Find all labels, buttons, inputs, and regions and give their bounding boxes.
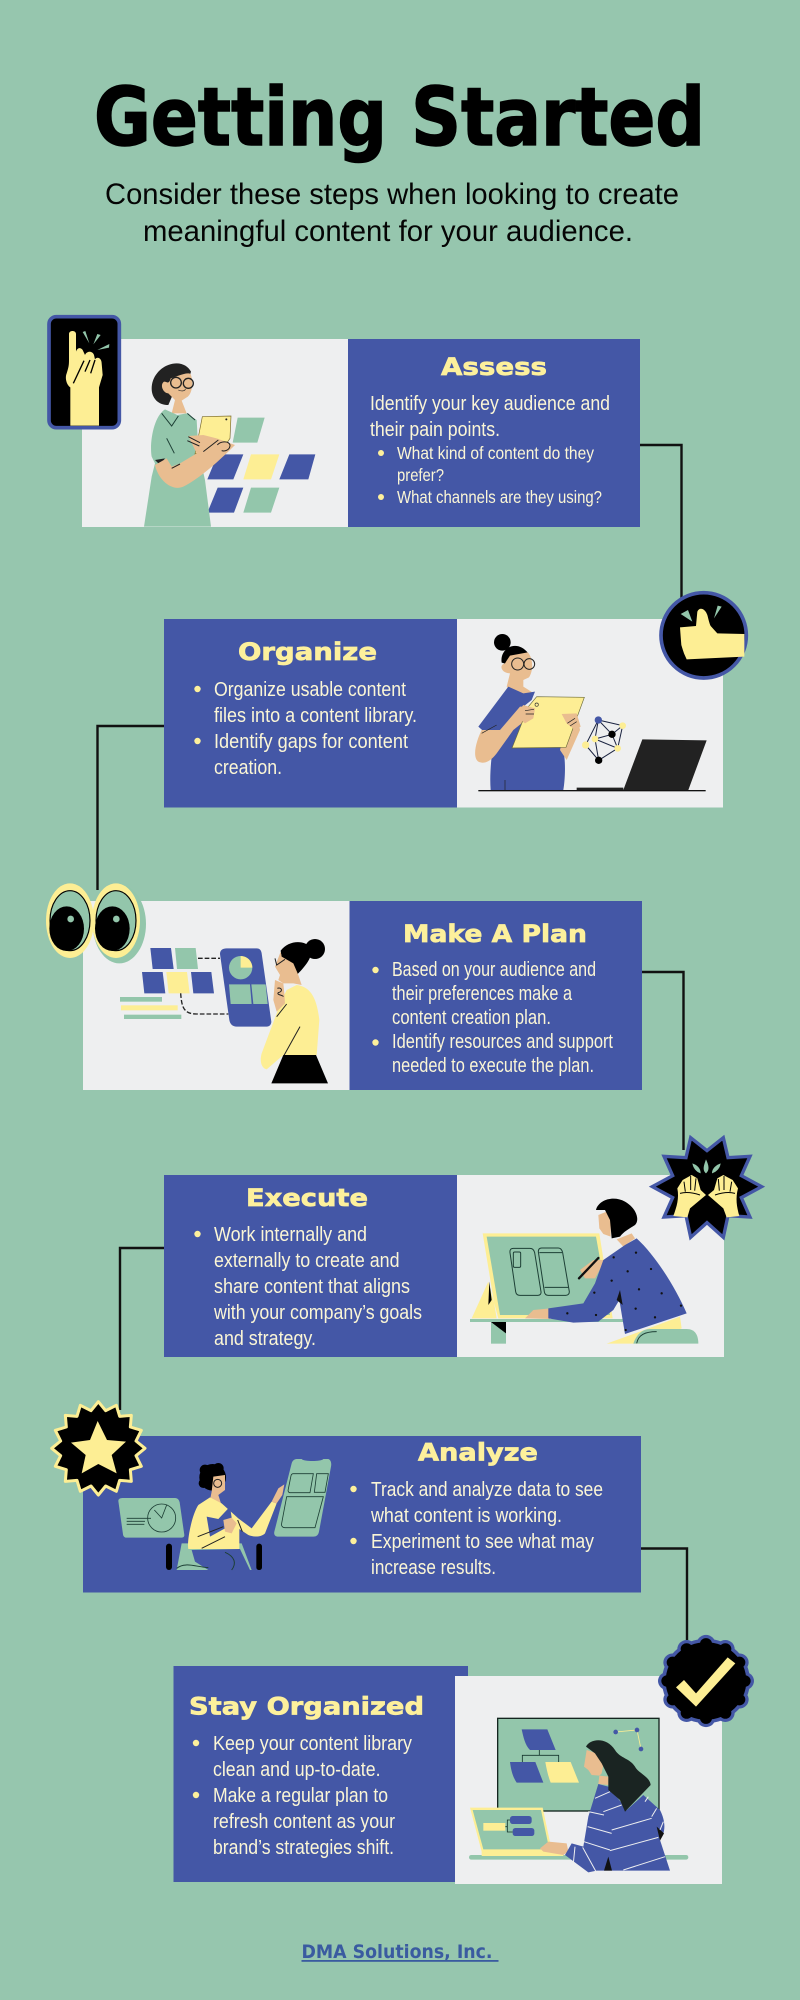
illustration: person analysing screens [118, 1459, 331, 1570]
heading: Assess: Assess [441, 353, 547, 381]
panel: Stay Organized [174, 1635, 754, 1884]
heading: Analyze: Analyze [418, 1438, 538, 1466]
arrow: connector Assess to Organize [640, 445, 682, 600]
panel: Make A Plan [46, 883, 642, 1090]
text: Stay Organized body: Make a regular plan to [213, 1785, 388, 1807]
illustration: woman at drawing tablet [470, 1199, 698, 1344]
panel: Organize [164, 593, 746, 808]
text: Make A Plan body: their preferences make a [392, 983, 573, 1005]
text: Execute body: share content that aligns [214, 1276, 410, 1298]
icon: pointing hand [49, 317, 119, 428]
heading: Make A Plan: Make A Plan [403, 920, 587, 948]
heading: Organize: Organize [238, 638, 377, 666]
illustration: woman at board with laptop [469, 1718, 688, 1872]
text: Analyze body [350, 1479, 603, 1579]
text: Organize body: creation. [214, 757, 282, 779]
illustration: woman planning with phone and cards [120, 939, 328, 1083]
text: Organize body [194, 679, 417, 779]
text: Make A Plan body: Identify resources and support [392, 1031, 613, 1053]
text: Assess body: Identify your key audience and [370, 393, 610, 415]
text: Assess body [370, 393, 610, 507]
text: Make A Plan body: content creation plan. [392, 1007, 551, 1029]
text: Analyze body: Experiment to see what may [371, 1531, 594, 1553]
title: Getting Started [94, 71, 705, 164]
text: Assess body: prefer? [397, 465, 444, 485]
subtitle: Consider these steps when looking to create [105, 178, 679, 211]
text: Organize body: Organize usable content [214, 679, 406, 701]
icon: raised hands burst [652, 1138, 762, 1237]
arrow: connector Execute to Analyze [120, 1248, 164, 1410]
panel: Execute [164, 1138, 762, 1357]
arrow: connector Analyze to Stay Organized [641, 1548, 687, 1640]
text: Stay Organized body: clean and up-to-date. [213, 1759, 380, 1781]
text: Organize body: files into a content library. [214, 705, 417, 727]
illustration: woman with tablet and cards [144, 363, 315, 527]
arrow: connector Make A Plan to Execute [642, 972, 684, 1150]
panel: Analyze [52, 1402, 641, 1592]
text: Assess body: their pain points. [370, 419, 500, 441]
text: Execute body: and strategy. [214, 1328, 316, 1350]
icon: thumbs up [661, 593, 746, 678]
text: Stay Organized body [193, 1733, 412, 1859]
footer link: DMA Solutions, Inc. [302, 1941, 492, 1963]
icon: check mark badge [658, 1635, 754, 1727]
text: Execute body [194, 1224, 422, 1350]
icon: eyes [46, 883, 146, 963]
text: Make A Plan body: Based on your audience and [392, 959, 596, 981]
arrow: connector Organize to Make A Plan [98, 726, 164, 890]
heading: Stay Organized: Stay Organized [189, 1692, 424, 1720]
text: Execute body: Work internally and [214, 1224, 367, 1246]
heading: Execute: Execute [246, 1184, 368, 1212]
text: Make A Plan body [372, 959, 613, 1077]
illustration: woman with tablet and laptop [475, 634, 707, 791]
text: Execute body: externally to create and [214, 1250, 400, 1272]
text: Analyze body: increase results. [371, 1557, 496, 1579]
subtitle: meaningful content for your audience. [143, 215, 633, 248]
panel: Assess [49, 317, 640, 527]
text: Assess body: What channels are they using? [397, 487, 602, 507]
text: Assess body: What kind of content do they [397, 443, 594, 463]
text: Analyze body: Track and analyze data to see [371, 1479, 603, 1501]
text: Organize body: Identify gaps for content [214, 731, 408, 753]
text: Make A Plan body: needed to execute the plan. [392, 1055, 594, 1077]
text: Stay Organized body: Keep your content library [213, 1733, 412, 1755]
icon: star badge [52, 1402, 145, 1495]
subtitle [105, 178, 679, 248]
text: Analyze body: what content is working. [370, 1505, 562, 1527]
text: Stay Organized body: refresh content as your [213, 1811, 395, 1833]
text: Execute body: with your company’s goals [213, 1302, 422, 1324]
text: Stay Organized body: brand’s strategies shift. [213, 1837, 394, 1859]
